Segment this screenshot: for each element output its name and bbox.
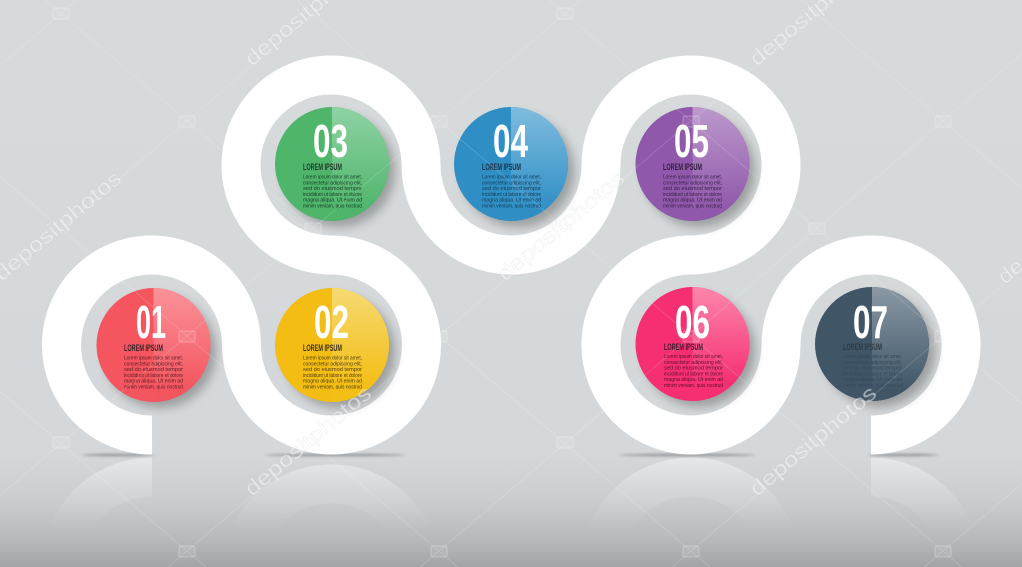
step 07: magna aliqua. Ut enim ad [843, 377, 902, 383]
step 03: minim veniam, quis nostrud [303, 204, 362, 210]
step 04: 04 [493, 115, 528, 167]
step 06: 06 [675, 296, 710, 348]
step 06: minim veniam, quis nostrud [664, 383, 723, 389]
step 02: Lorem ipsum dolor sit amet, [303, 356, 362, 362]
step 02 [275, 288, 395, 408]
step 02: consectetur adipiscing elit, [303, 361, 362, 367]
step 04: magna aliqua. Ut enim ad [482, 198, 541, 204]
step 05: LOREM IPSUM [663, 162, 702, 173]
step 07: Lorem ipsum dolor sit amet, [843, 354, 902, 360]
step 03: consectetur adipiscing elit, [303, 180, 362, 186]
step 03: sed do eiusmod tempor [303, 186, 362, 192]
step 01: incididunt ut labore et dolore [124, 373, 183, 379]
step 07: LOREM IPSUM [843, 342, 882, 353]
step 05: incididunt ut labore et dolore [663, 192, 722, 198]
step 03: 03 [313, 115, 348, 167]
step 04: sed do eiusmod tempor [482, 186, 541, 192]
step 05: sed do eiusmod tempor [663, 186, 722, 192]
white S-curve ribbon [62, 75, 961, 435]
step 01: magna aliqua. Ut enim ad [124, 379, 183, 385]
step 07: sed do eiusmod tempor [843, 366, 902, 372]
step 07: 07 [853, 296, 888, 348]
floor shadows [82, 454, 938, 456]
step 01: sed do eiusmod tempor [124, 367, 183, 373]
step 02: LOREM IPSUM [303, 343, 342, 354]
step 03 [275, 107, 395, 227]
step 03: magna aliqua. Ut enim ad [303, 198, 362, 204]
step 02: magna aliqua. Ut enim ad [303, 379, 362, 385]
step 07: minim veniam, quis nostrud [843, 383, 902, 389]
ribbon reflection [62, 477, 961, 567]
step 05: minim veniam, quis nostrud [663, 204, 722, 210]
step 06: sed do eiusmod tempor [664, 366, 723, 372]
step 01: 01 [136, 296, 166, 348]
step 06: LOREM IPSUM [664, 342, 703, 353]
step 04: minim veniam, quis nostrud [482, 204, 541, 210]
step 05: 05 [674, 115, 709, 167]
step 03: LOREM IPSUM [303, 162, 342, 173]
step 03: Lorem ipsum dolor sit amet, [303, 174, 362, 180]
step 07: incididunt ut labore et dolore [843, 371, 902, 377]
step 05: Lorem ipsum dolor sit amet, [663, 174, 722, 180]
step 02: 02 [314, 296, 349, 348]
step 03: incididunt ut labore et dolore [303, 192, 362, 198]
step 06: Lorem ipsum dolor sit amet, [664, 354, 723, 360]
step 01: LOREM IPSUM [124, 343, 163, 354]
watermark text: depositphotos [240, 382, 376, 501]
step 01: minim veniam, quis nostrud [124, 384, 183, 390]
step 04: incididunt ut labore et dolore [482, 192, 541, 198]
step 07: consectetur adipiscing elit, [843, 360, 902, 366]
step 06: consectetur adipiscing elit, [664, 360, 723, 366]
step 04: Lorem ipsum dolor sit amet, [482, 174, 541, 180]
step 07 [815, 287, 935, 407]
step 05: consectetur adipiscing elit, [663, 180, 722, 186]
step 06: magna aliqua. Ut enim ad [664, 377, 723, 383]
step 05: magna aliqua. Ut enim ad [663, 198, 722, 204]
watermark text: depositphotos [745, 382, 881, 501]
step 02: incididunt ut labore et dolore [303, 373, 362, 379]
step 06 [636, 287, 755, 407]
step 04: consectetur adipiscing elit, [482, 180, 541, 186]
watermark text: depositphotos [493, 167, 629, 286]
step 01: consectetur adipiscing elit, [124, 361, 183, 367]
step 05 [636, 107, 755, 227]
step 04 [454, 107, 574, 227]
step 01 [96, 288, 216, 408]
step 06: incididunt ut labore et dolore [664, 371, 723, 377]
step 02: sed do eiusmod tempor [303, 367, 362, 373]
step 04: LOREM IPSUM [482, 162, 521, 173]
step 01: Lorem ipsum dolor sit amet, [124, 356, 183, 362]
step 02: minim veniam, quis nostrud [303, 384, 362, 390]
